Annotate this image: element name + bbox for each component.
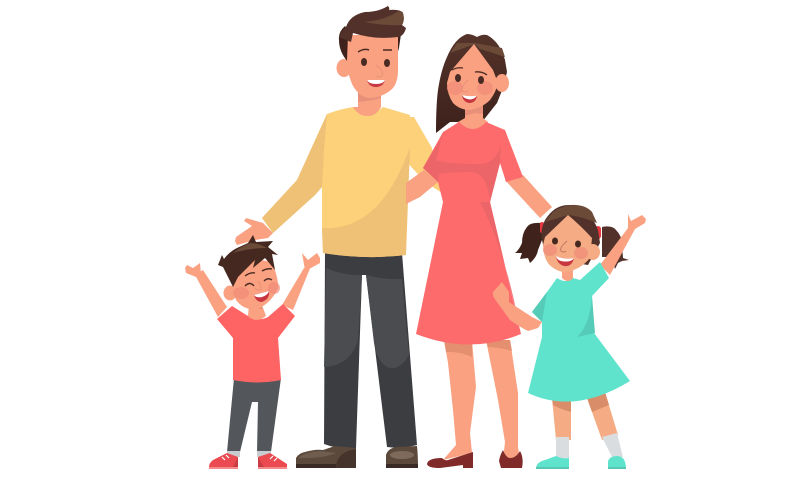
father hair <box>339 6 406 42</box>
girl socks <box>556 433 623 458</box>
girl head hair <box>541 205 600 265</box>
father shoes <box>296 446 418 468</box>
boy hair highlight <box>233 243 267 253</box>
mother left arm <box>406 170 438 204</box>
mother dress <box>416 122 523 344</box>
figure: mother <box>406 34 552 468</box>
boy shoes <box>209 453 287 469</box>
mother blush <box>447 81 493 95</box>
mother neck <box>458 105 488 130</box>
mother shoes <box>427 450 523 468</box>
girl neck <box>562 268 573 281</box>
father back hair <box>339 26 401 62</box>
mother legs <box>443 340 520 460</box>
girl hair highlight <box>545 205 597 223</box>
boy socks <box>227 451 271 457</box>
figure: boy <box>185 235 320 469</box>
figure: girl <box>493 205 646 469</box>
mother right arm <box>505 175 552 218</box>
boy shirt <box>217 304 295 382</box>
boy mouth <box>254 291 269 302</box>
father left hand <box>235 218 273 245</box>
girl shoes <box>536 456 626 469</box>
girl hair ties <box>540 222 601 239</box>
girl ear <box>586 244 600 260</box>
girl legs <box>552 392 618 440</box>
father face features <box>358 49 392 87</box>
boy neck <box>248 305 266 320</box>
father shirt <box>262 107 410 257</box>
mother ear <box>495 74 509 92</box>
mother back hair <box>436 34 507 133</box>
mother hair highlight <box>450 43 505 57</box>
boy blush <box>233 282 280 299</box>
girl left arm and hand <box>493 282 542 331</box>
father face <box>347 35 398 98</box>
father trousers <box>324 253 417 448</box>
girl raised arm and hand <box>600 214 646 275</box>
boy trousers <box>227 378 281 452</box>
mother face <box>447 44 498 110</box>
girl blush <box>543 244 588 259</box>
figure: father <box>235 6 442 468</box>
father neck <box>353 92 381 116</box>
boy face features <box>245 269 272 290</box>
boy hair <box>218 235 278 287</box>
girl face features <box>552 238 581 266</box>
girl dress <box>528 262 630 402</box>
girl pigtails <box>515 223 629 269</box>
mother face features <box>452 68 487 103</box>
girl face <box>543 215 592 272</box>
father hair highlight <box>364 11 404 25</box>
boy raised arms and hands <box>185 253 320 317</box>
boy ear <box>224 286 236 300</box>
boy face <box>233 258 278 309</box>
father ear <box>336 59 352 77</box>
father right arm sleeve behind <box>405 117 442 193</box>
